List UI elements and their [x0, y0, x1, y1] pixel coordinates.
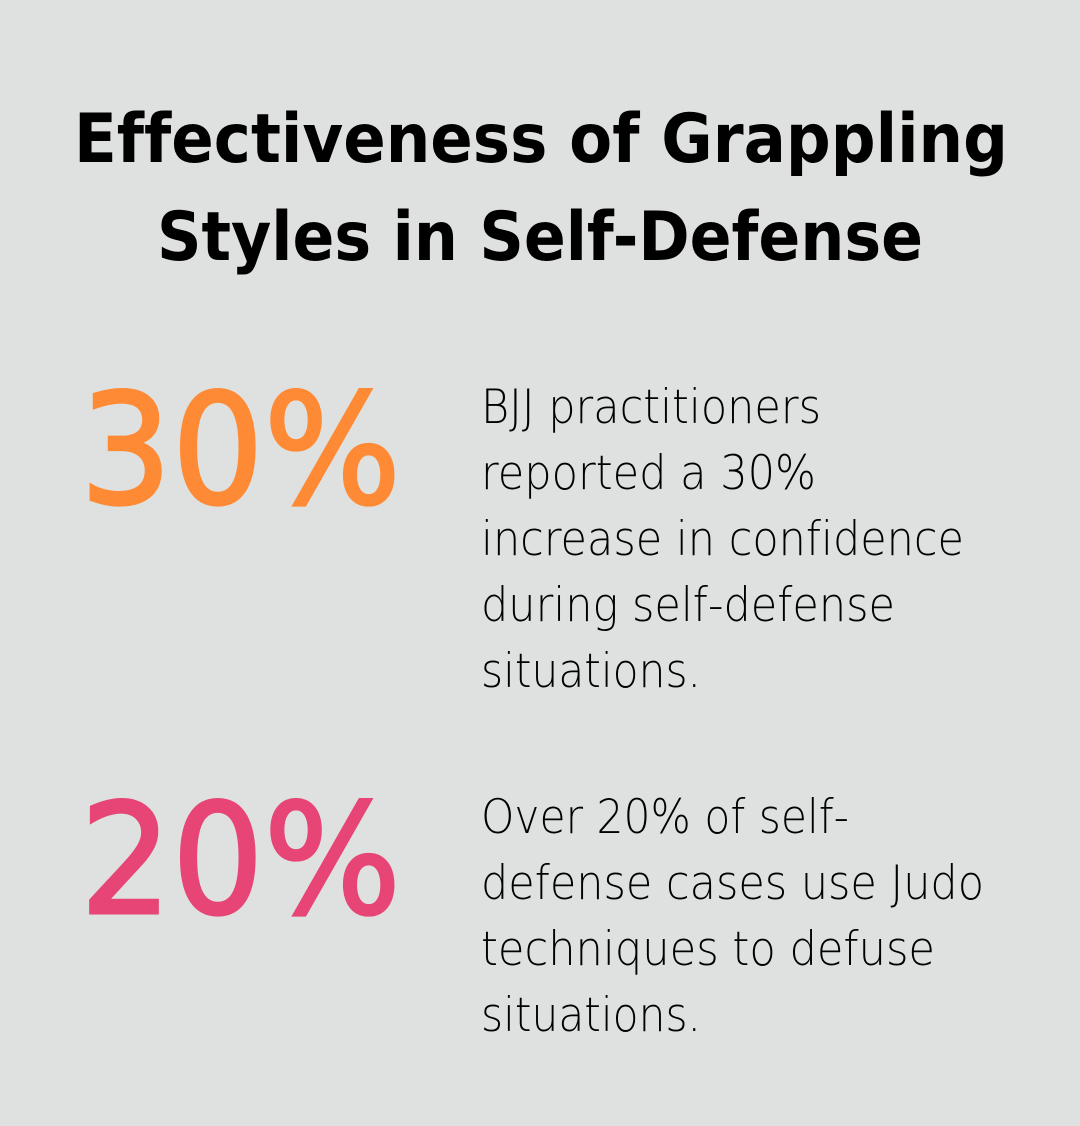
text block: Over 20%: defense cases use Judo [481, 856, 984, 911]
text block: BJJ practitioners: reported a 30% [481, 446, 816, 501]
text block: BJJ practitioners: situations. [481, 644, 701, 699]
text block: BJJ practitioners: during self-defense [481, 578, 895, 633]
text block: BJJ practitioners: BJJ practitioners [481, 380, 821, 435]
stat: 20%: 20% [80, 772, 401, 950]
text block: Over 20%: Over 20% of self- [481, 790, 849, 845]
text block: Over 20%: techniques to defuse [481, 922, 935, 977]
stat: 30%: 30% [80, 362, 401, 540]
title [74, 100, 1008, 277]
title: Styles in Self-Defense [157, 198, 923, 277]
title: Effectiveness of Grappling [74, 100, 1008, 179]
text block: BJJ practitioners: increase in confidence [481, 512, 964, 567]
text block: BJJ practitioners [481, 380, 964, 699]
text block: Over 20%: situations. [481, 988, 701, 1043]
text block: Over 20% [481, 790, 984, 1043]
